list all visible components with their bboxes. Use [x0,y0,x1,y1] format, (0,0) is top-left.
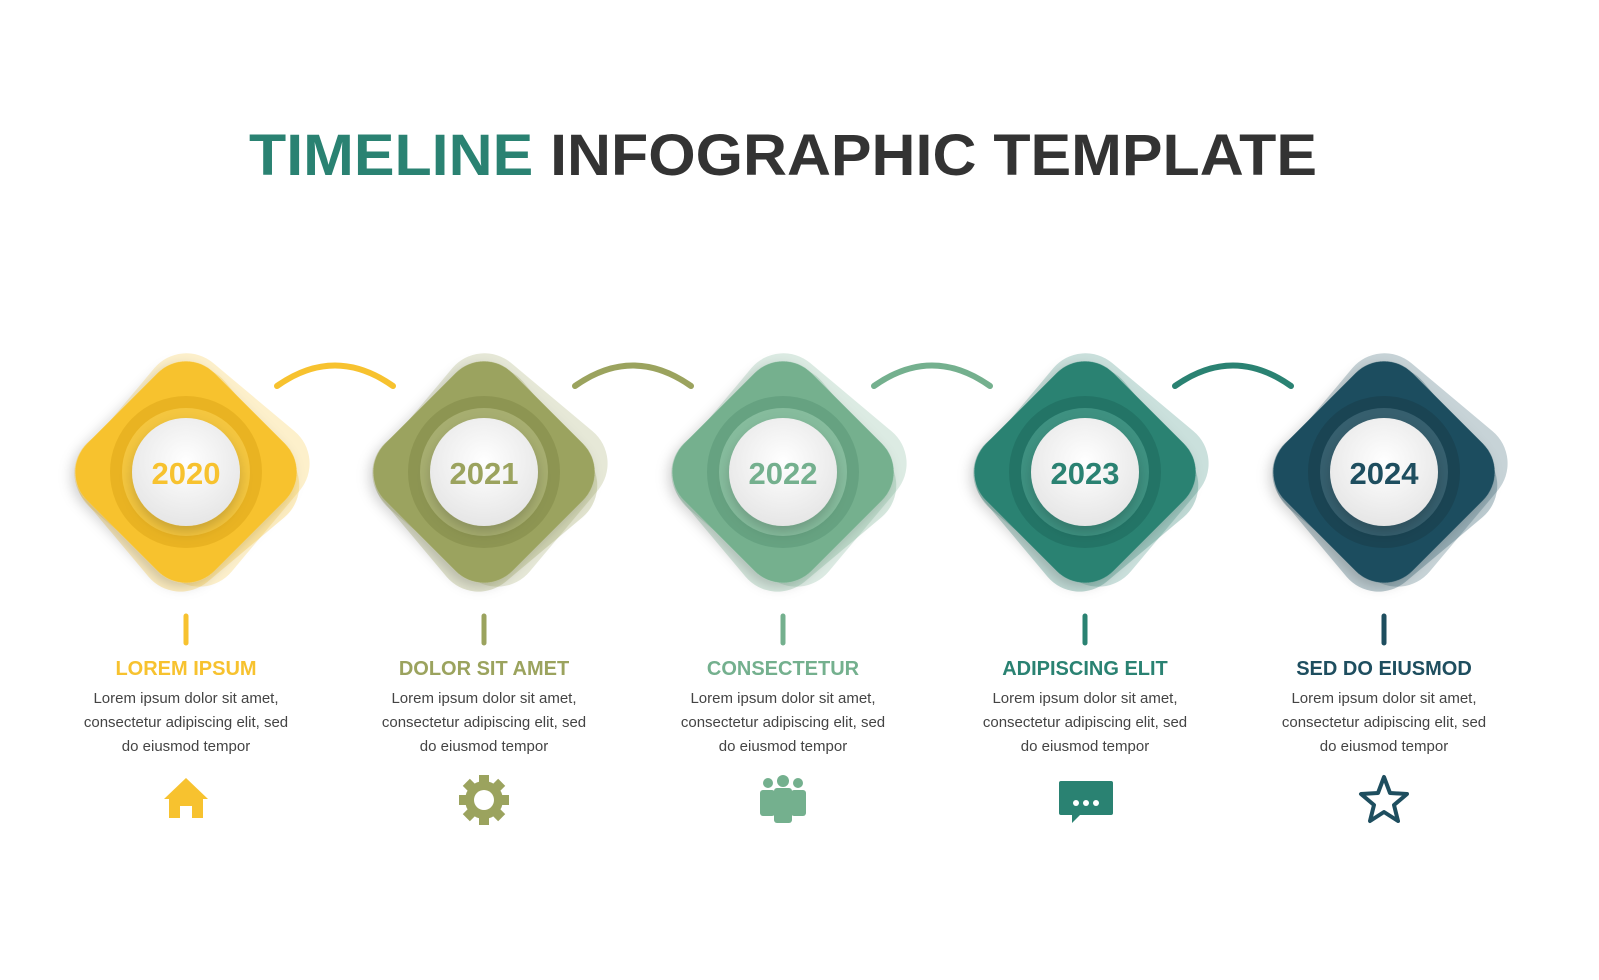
text block 3: Lorem ipsum dolor sit amet, [690,690,876,707]
step 2022: 2022 [749,456,817,491]
step 2022 [654,336,924,609]
step 2024: 2024 [1350,456,1419,491]
text block 2: consectetur adipiscing elit, sed [382,714,586,731]
text block 2: do eiusmod tempor [420,738,548,755]
title: TIMELINE INFOGRAPHIC TEMPLATE [249,123,1317,188]
text block 4: do eiusmod tempor [1021,738,1149,755]
text block 4 [983,658,1187,755]
icon: star [1361,777,1407,821]
text block 4: Lorem ipsum dolor sit amet, [992,690,1178,707]
text block 3: consectetur adipiscing elit, sed [681,714,885,731]
step 2021: 2021 [450,456,518,491]
icon: gear [459,775,509,825]
text block 5: SED DO EIUSMOD [1296,658,1472,680]
icon: chat [1059,781,1113,823]
tick marks [186,616,1384,643]
text block 5: do eiusmod tempor [1320,738,1448,755]
text block 1 [84,658,288,755]
text block 5: consectetur adipiscing elit, sed [1282,714,1486,731]
step 2020: 2020 [152,456,220,491]
text block 5 [1282,658,1486,755]
text block 4: ADIPISCING ELIT [1002,658,1168,680]
text block 1: Lorem ipsum dolor sit amet, [93,690,279,707]
step 2024 [1255,336,1525,609]
text block 3 [681,658,885,755]
step 2023 [956,336,1226,609]
text block 2: Lorem ipsum dolor sit amet, [391,690,577,707]
text block 2 [382,658,586,755]
step 2023: 2023 [1051,456,1119,491]
icon: house [164,778,208,818]
step 2020 [57,336,327,609]
text block 4: consectetur adipiscing elit, sed [983,714,1187,731]
text block 3: CONSECTETUR [707,658,860,680]
icon: people [760,775,806,823]
text block 1: do eiusmod tempor [122,738,250,755]
arc connectors [277,366,1291,386]
text block 1: LOREM IPSUM [115,658,257,680]
text block 1: consectetur adipiscing elit, sed [84,714,288,731]
text block 5: Lorem ipsum dolor sit amet, [1291,690,1477,707]
text block 2: DOLOR SIT AMET [399,658,569,680]
text block 3: do eiusmod tempor [719,738,847,755]
step 2021 [355,336,625,609]
